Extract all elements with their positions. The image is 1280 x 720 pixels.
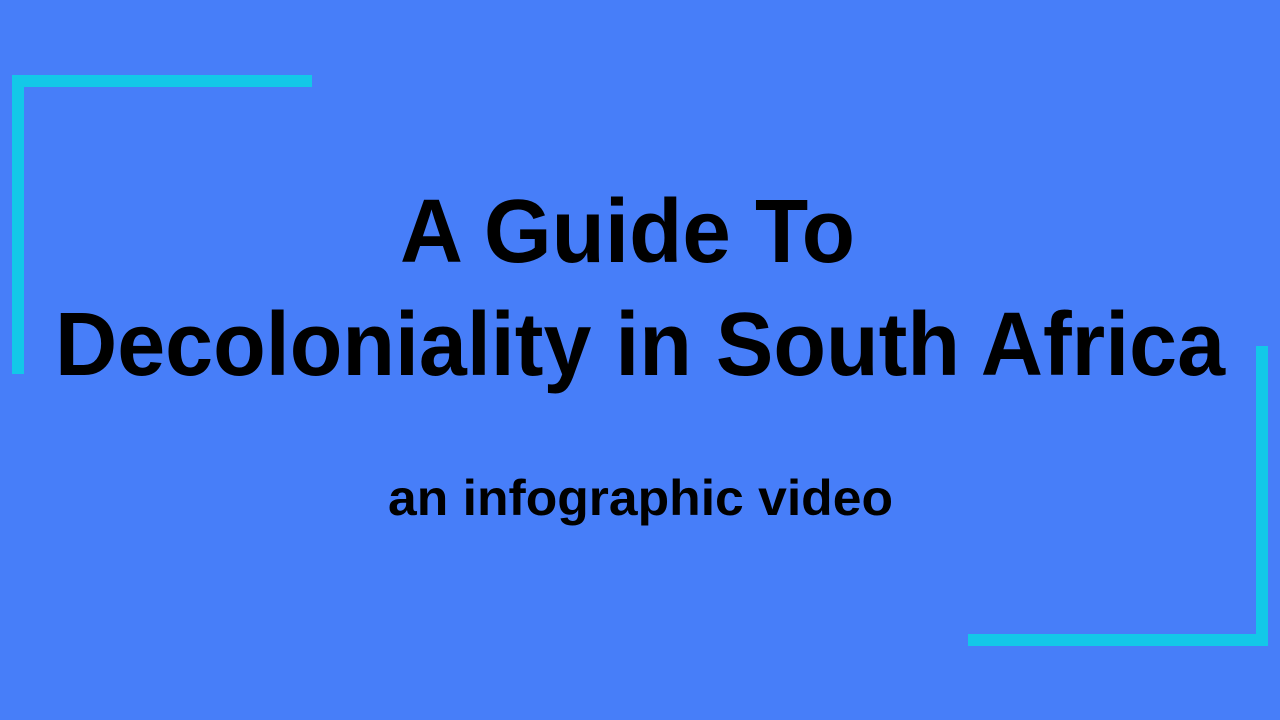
title: A Guide To [400,182,855,282]
subtitle: an infographic video [388,470,893,526]
title [55,182,1226,395]
frame: bottom-right bracket [968,346,1268,646]
frame: top-left bracket [12,75,312,374]
title: Decoloniality in South Africa [55,295,1226,395]
